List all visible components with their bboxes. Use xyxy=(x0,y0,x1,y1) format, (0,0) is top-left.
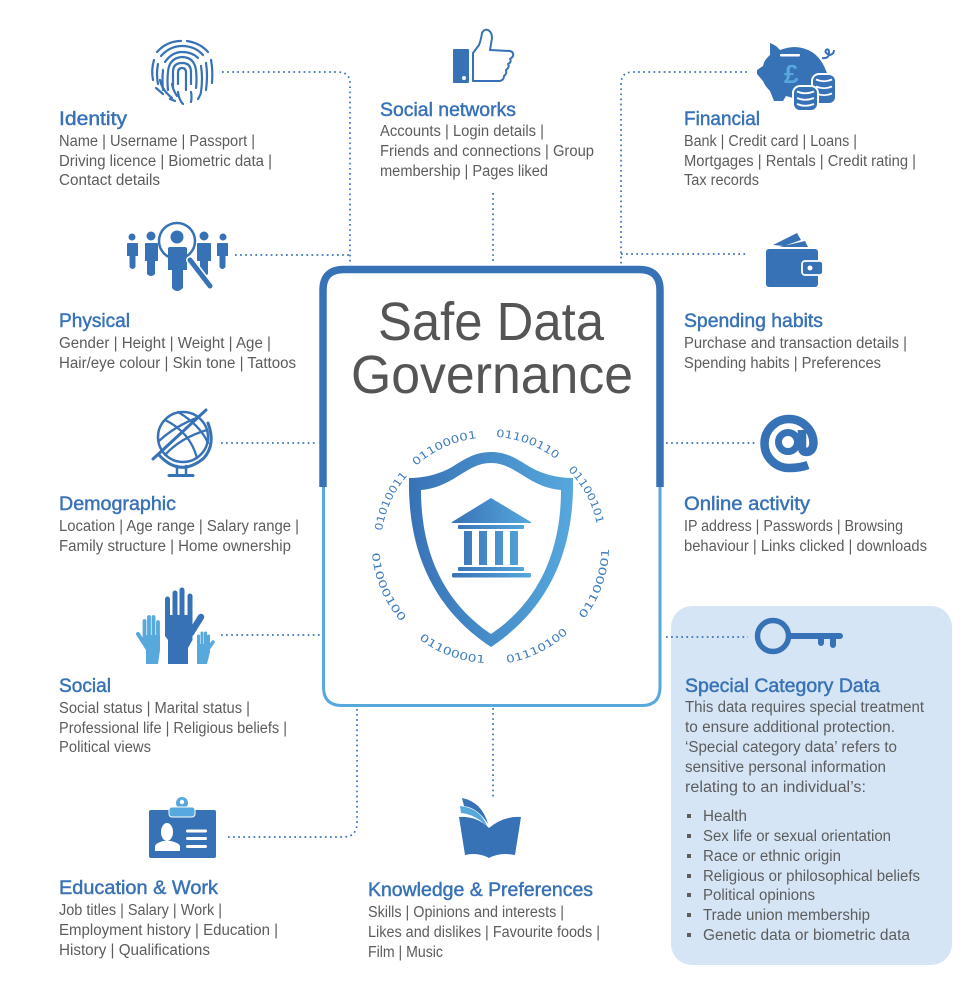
block: spending habits: Purchase and transaction details | xyxy=(684,335,907,352)
block: online activity: IP address | Passwords | Browsing xyxy=(684,518,903,535)
block: knowledge and preferences xyxy=(368,880,600,961)
binary ring: 01100110 xyxy=(497,430,559,458)
icon: key xyxy=(758,620,840,652)
block: special category data: Political opinions xyxy=(703,887,815,904)
icon: globe xyxy=(153,410,211,476)
block: online activity: Online activity xyxy=(684,494,811,515)
block: education and work: Employment history | Education | xyxy=(59,922,278,939)
block: physical xyxy=(59,311,296,372)
block: identity: Driving licence | Biometric data | xyxy=(59,153,272,170)
panel: central safe data governance frame xyxy=(323,270,660,706)
block: identity xyxy=(59,109,272,189)
binary ring: 01010011 xyxy=(374,472,407,530)
block: demographic: Demographic xyxy=(59,494,176,515)
block: special category data: Genetic data or biometric data xyxy=(703,927,910,944)
block: special category data: Health xyxy=(703,808,747,825)
title: Governance xyxy=(351,345,633,405)
icon: open book xyxy=(459,798,521,858)
title xyxy=(351,292,633,405)
icon: people with magnifier xyxy=(127,223,228,291)
icon: thumbs up xyxy=(453,30,513,83)
block: social: Professional life | Religious beliefs | xyxy=(59,720,287,737)
icon: piggy bank with coins: £ xyxy=(784,59,799,89)
block: social: Social xyxy=(59,676,111,697)
block: special category data: This data requires special treatment xyxy=(685,699,925,716)
block: education and work: Job titles | Salary | Work | xyxy=(59,902,222,919)
block: special category data: Religious or philosophical beliefs xyxy=(703,868,920,885)
binary ring: 01000100 xyxy=(372,554,406,620)
block: social networks xyxy=(380,100,594,180)
block: social: Social status | Marital status | xyxy=(59,700,250,717)
icon: bank building xyxy=(452,498,531,578)
block: spending habits: Spending habits xyxy=(684,311,823,332)
block: financial xyxy=(684,109,916,189)
icon: id badge xyxy=(149,797,216,858)
icon: raised hands xyxy=(138,590,213,664)
block: online activity xyxy=(684,494,927,555)
block: demographic: Family structure | Home ownership xyxy=(59,538,291,555)
icon: at sign xyxy=(765,419,814,468)
block: social networks: Social networks xyxy=(380,100,516,121)
binary ring: 01100001 xyxy=(580,550,609,618)
block: demographic xyxy=(59,494,299,555)
block: demographic: Location | Age range | Salary range | xyxy=(59,518,299,535)
block: education and work: History | Qualifications xyxy=(59,942,210,959)
block: spending habits: Spending habits | Preferences xyxy=(684,355,881,372)
icon: shield xyxy=(409,452,573,647)
block: knowledge and preferences: Likes and dislikes | Favourite foods | xyxy=(368,924,600,941)
block: identity: Identity xyxy=(59,109,128,130)
icon: fingerprint xyxy=(152,41,212,104)
icon: wallet xyxy=(766,233,823,287)
binary ring: 01100101 xyxy=(570,466,604,523)
connectors xyxy=(221,72,757,837)
block: social xyxy=(59,676,287,756)
block: identity: Name | Username | Passport | xyxy=(59,133,255,150)
block: education and work xyxy=(59,878,278,959)
block: education and work: Education & Work xyxy=(59,878,219,899)
block: special category data: Sex life or sexual orientation xyxy=(703,828,891,845)
block: knowledge and preferences: Skills | Opinions and interests | xyxy=(368,904,564,921)
title: Safe Data xyxy=(378,292,605,352)
block: online activity: behaviour | Links clicked | downloads xyxy=(684,538,927,555)
block: special category data: to ensure additional protection. xyxy=(685,719,895,736)
block: special category data: ‘Special category data’ refers to xyxy=(685,739,897,756)
binary ring: 01110100 xyxy=(507,629,566,662)
block: identity: Contact details xyxy=(59,172,160,189)
block: social networks: membership | Pages liked xyxy=(380,163,548,180)
block: financial: Bank | Credit card | Loans | xyxy=(684,133,857,150)
binary ring: 01100001 xyxy=(420,634,484,663)
block: physical: Physical xyxy=(59,311,130,332)
block: special category data: sensitive personal information xyxy=(685,759,886,776)
block: knowledge and preferences: Film | Music xyxy=(368,944,443,961)
block: financial: Mortgages | Rentals | Credit rating | xyxy=(684,153,916,170)
block: special category data: relating to an individual’s: xyxy=(685,779,866,796)
block: physical: Gender | Height | Weight | Age | xyxy=(59,335,271,352)
block: knowledge and preferences: Knowledge & Preferences xyxy=(368,880,593,901)
block: physical: Hair/eye colour | Skin tone | Tattoos xyxy=(59,355,296,372)
block: financial: Tax records xyxy=(684,172,759,189)
block: financial: Financial xyxy=(684,109,760,130)
icon: piggy bank with coins xyxy=(757,43,837,112)
block: social networks: Friends and connections | Group xyxy=(380,143,594,160)
block: social networks: Accounts | Login details | xyxy=(380,123,544,140)
block: special category data: Trade union membership xyxy=(703,907,870,924)
block: special category data: Race or ethnic origin xyxy=(703,848,841,865)
block: special category data: Special Category Data xyxy=(685,676,880,697)
panel: special category background xyxy=(671,606,952,965)
block: special category data xyxy=(685,676,925,944)
block: social: Political views xyxy=(59,739,151,756)
binary ring: 01100001 xyxy=(412,431,476,464)
binary ring xyxy=(372,430,609,663)
block: spending habits xyxy=(684,311,907,372)
